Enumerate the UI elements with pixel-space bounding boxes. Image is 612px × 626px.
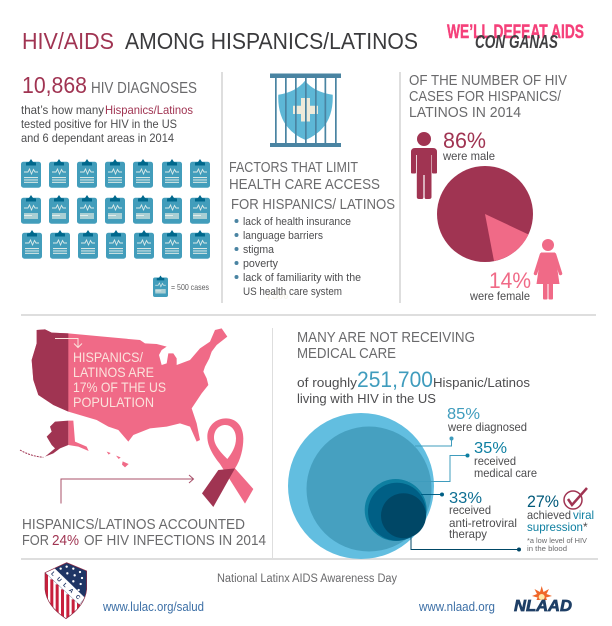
list: factors: stigma: [243, 244, 275, 256]
heading: number of cases: [409, 72, 567, 121]
heading: not receiving care: [297, 329, 475, 362]
text block: 251,700 living with HIV: of roughly: [297, 375, 358, 390]
logo: NLAAD: [514, 586, 572, 615]
logo: LULAC shield: A: [67, 588, 74, 595]
stat: 14% female: 14%: [489, 268, 531, 293]
callout: 85% diagnosed: [415, 406, 527, 446]
list: factors: language barriers: [243, 230, 323, 242]
title: HIV/AIDS: [22, 28, 114, 54]
legend: 500 cases: = 500 cases: [171, 282, 209, 292]
logo: LULAC shield: L: [61, 582, 68, 589]
callout: 33% anti-retroviral: anti-retroviral: [449, 516, 517, 530]
list: factors: poverty: [243, 258, 278, 270]
text block: 24 percent of infections: [22, 516, 266, 549]
logo: NLAAD: NLAAD: [514, 598, 572, 615]
text block: 251,700 living with HIV: [297, 367, 531, 406]
stat: 10,868 HIV diagnoses: 10,868: [22, 72, 87, 98]
callout: 85% diagnosed: 85%: [447, 406, 480, 423]
icon: awareness ribbon: [202, 418, 253, 507]
stat: 86% male: [442, 128, 495, 163]
arrow: map pointer: [55, 338, 82, 348]
text block: 24 percent of infections: HISPANICS/LATINOS ACCOUNTED: [22, 516, 245, 533]
text block: 24 percent of infections: 24%: [52, 532, 79, 549]
stat: 14% female: were female: [469, 289, 530, 303]
text block: 17 percent of population: HISPANICS/: [73, 349, 143, 365]
text block: 17 percent of population: 17% OF THE US: [73, 379, 166, 395]
callout: 27% viral suppression: achieved: [527, 508, 571, 522]
text block: diagnoses description: that’s how many: [21, 103, 104, 117]
heading: number of cases: CASES FOR HISPANICS/: [409, 88, 562, 105]
heading: factors: FACTORS THAT LIMIT: [229, 159, 358, 176]
footer: [43, 561, 572, 619]
pie chart: gender split: [437, 166, 533, 262]
text: awareness day: National Latinx AIDS Awareness Day: [217, 573, 397, 585]
logo: we'll defeat aids con ganas: [447, 21, 584, 52]
heading: number of cases: OF THE NUMBER OF HIV: [409, 72, 567, 89]
text block: 24 percent of infections: FOR: [22, 532, 49, 549]
heading: factors: [229, 159, 395, 213]
stat: 86% male: 86%: [443, 128, 486, 153]
list: factors: lack of familiarity with the: [243, 272, 361, 284]
stat: 14% female: [469, 268, 531, 303]
title: [22, 28, 418, 54]
callout: 35% medical care: received: [474, 454, 516, 468]
text block: 17 percent of population: LATINOS ARE: [73, 364, 154, 380]
chart: nested circles: [288, 413, 434, 559]
panel: factors limiting access: [229, 74, 395, 302]
callout: 27% viral suppression: *a low level of HIV: [527, 538, 587, 545]
heading: not receiving care: MANY ARE NOT RECEIVING: [297, 329, 475, 346]
logo: LULAC shield: U: [55, 576, 62, 584]
heading: not receiving care: MEDICAL CARE: [297, 345, 396, 362]
callout: 33% anti-retroviral: [421, 490, 517, 541]
link: nlaad: www.nlaad.org: [418, 600, 495, 614]
icon: woman: [536, 239, 560, 300]
list: factors: US health care system: [243, 286, 342, 298]
legend: 500 cases: [153, 276, 209, 297]
icon: check mark circle: [564, 488, 587, 509]
panel: population map: [20, 328, 266, 549]
logo: LULAC shield: C: [74, 594, 81, 601]
icon: shield behind bars: [270, 74, 341, 147]
dividers: [21, 72, 598, 560]
callout: 27% viral suppression: 27%: [527, 493, 559, 511]
text block: 17 percent of population: [73, 349, 166, 410]
arrow: to ribbon: [61, 475, 194, 504]
panel: medical care: [288, 329, 594, 559]
text block: diagnoses description: [21, 103, 193, 145]
callout: 33% anti-retroviral: 33%: [449, 490, 482, 507]
link: lulac: www.lulac.org/salud: [102, 600, 204, 614]
text block: 251,700 living with HIV: 251,700: [357, 367, 433, 392]
map: United States: [20, 328, 227, 467]
list: factors: lack of health insurance: [243, 216, 351, 228]
callout: 35% medical care: medical care: [474, 466, 537, 480]
text block: 17 percent of population: POPULATION: [73, 394, 154, 410]
callout: 35% medical care: 35%: [474, 440, 507, 457]
heading: number of cases: LATINOS IN 2014: [409, 104, 521, 121]
title: AMONG HISPANICS/LATINOS: [125, 28, 418, 54]
callout: 33% anti-retroviral: received: [449, 503, 491, 517]
icon: man: [411, 132, 437, 199]
text block: diagnoses description: and 6 dependant areas in 2014: [21, 131, 174, 145]
stat: 10,868 HIV diagnoses: HIV DIAGNOSES: [91, 80, 197, 97]
heading: factors: HEALTH CARE ACCESS: [229, 176, 380, 193]
stat: 86% male: were male: [442, 149, 495, 163]
text block: 251,700 living with HIV: living with HIV in the US: [297, 391, 436, 406]
callout: 27% viral suppression: supression: [527, 520, 583, 534]
logo: LULAC shield: L: [49, 571, 56, 578]
logo: LULAC shield: [43, 561, 88, 619]
callout: 33% anti-retroviral: therapy: [449, 527, 487, 541]
callout: 27% viral suppression: viral: [573, 508, 594, 522]
callout: 27% viral suppression: in the blood: [527, 546, 567, 553]
callout: 27% viral suppression: [411, 493, 594, 553]
text block: diagnoses description: tested positive for HIV in the US: [21, 117, 177, 131]
callout: 85% diagnosed: were diagnosed: [447, 420, 527, 434]
panel: cases by gender: [409, 72, 567, 303]
heading: factors: FOR HISPANICS/ LATINOS: [231, 196, 395, 213]
callout: 35% medical care: [408, 440, 537, 482]
pictogram: clipboards: [21, 159, 210, 259]
callout: 27% viral suppression: *: [583, 520, 588, 534]
text block: 251,700 living with HIV: Hispanic/Latinos: [433, 375, 531, 390]
logo: we'll defeat aids con ganas: CON GANAS: [475, 32, 558, 52]
text block: 24 percent of infections: OF HIV INFECTIONS IN 2014: [84, 532, 266, 549]
text block: diagnoses description: Hispanics/Latinos: [105, 103, 193, 117]
list: factors: [234, 216, 361, 302]
stat: 10,868 HIV diagnoses: [22, 72, 197, 98]
panel: HIV diagnoses: [21, 72, 210, 297]
list: factors: 75%: [266, 290, 288, 302]
